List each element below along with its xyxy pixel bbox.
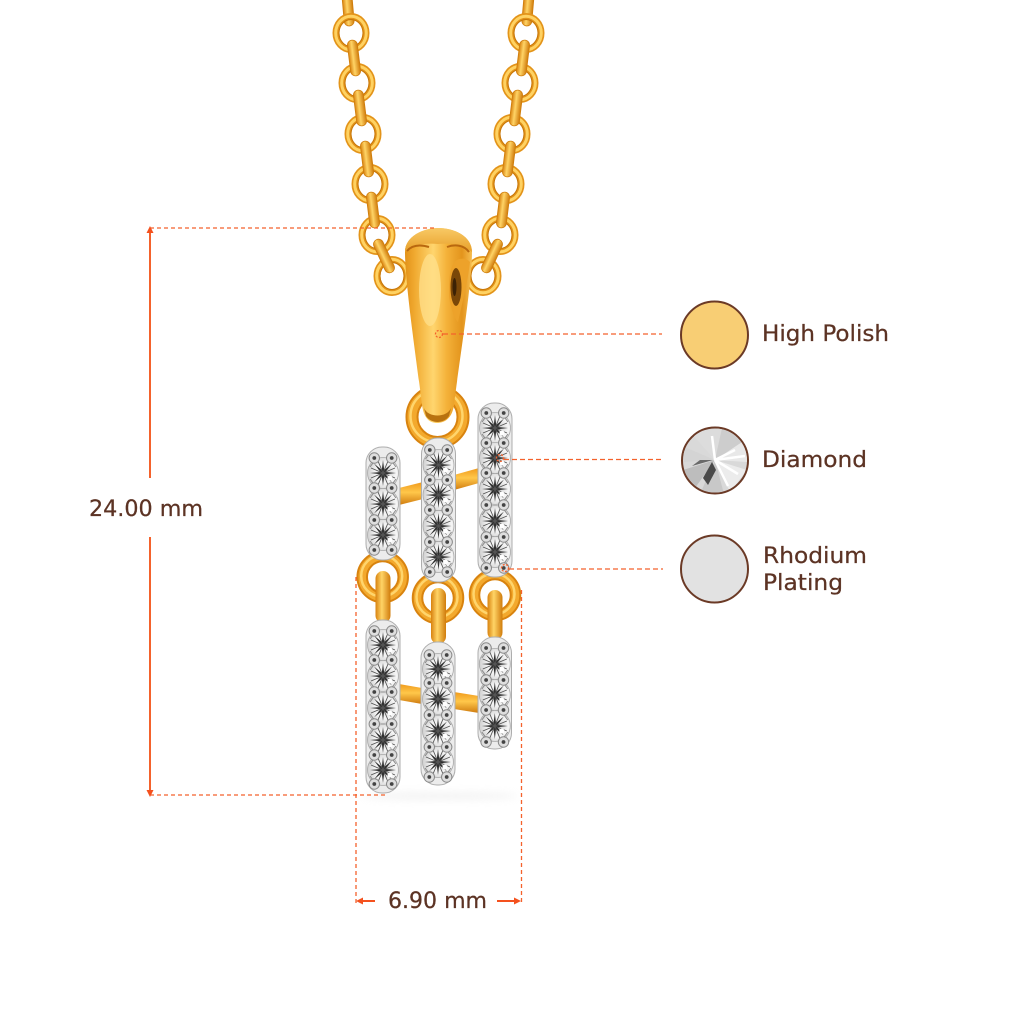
- height dimension: 24.00 mm: 24.00 mm: [89, 497, 203, 522]
- pendant bail: [405, 228, 472, 423]
- connector loops: [376, 571, 502, 644]
- diamond bar: bottom centre: [421, 642, 455, 785]
- legend: high polish: High Polish: [762, 322, 889, 347]
- legend: rhodium plating: Rhodium: [763, 544, 867, 569]
- legend: rhodium plating: [681, 536, 867, 602]
- callout leader: high polish: [436, 330, 662, 338]
- ground shadow: [362, 792, 518, 800]
- lower jump rings: [361, 556, 516, 618]
- legend: high polish: [681, 302, 889, 368]
- diamond bar: top right: [478, 403, 512, 577]
- diamond bar: bottom left: [366, 620, 400, 793]
- chain: left strand: [336, 0, 407, 293]
- top jump ring: [410, 390, 463, 442]
- chain: right strand: [468, 0, 541, 293]
- width dimension: 6.90 mm: [356, 577, 522, 914]
- legend: rhodium plating: Plating: [763, 571, 843, 596]
- diamond bar: bottom right: [478, 637, 512, 749]
- diamond bar: top centre: [422, 438, 456, 582]
- connector rods: [399, 468, 479, 713]
- callout leader: diamond: [496, 454, 661, 462]
- diamond bar: top left: [366, 447, 400, 560]
- width dimension: 6.90 mm: 6.90 mm: [388, 889, 487, 914]
- callout leader: rhodium: [502, 564, 663, 572]
- legend: diamond: Diamond: [762, 448, 867, 473]
- height dimension: 24.00 mm: [89, 226, 437, 797]
- legend: diamond: [682, 428, 867, 494]
